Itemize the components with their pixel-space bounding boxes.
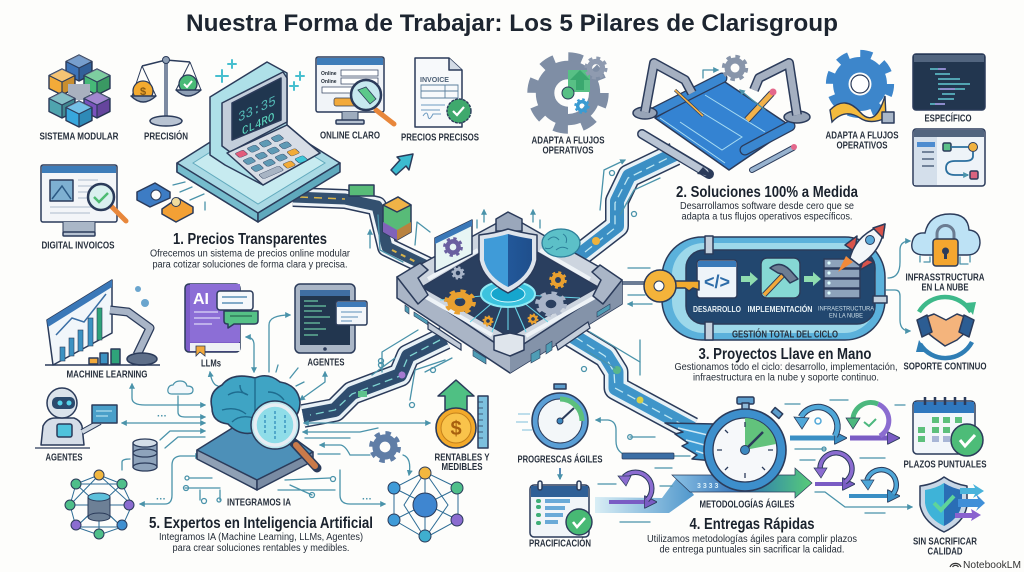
text: pillar 5 description: para crear soluciones rentables y medibles. bbox=[172, 543, 350, 554]
heading: pillar 4: 4. Entregas Rápidas bbox=[690, 516, 815, 533]
icon: winged stopwatch bbox=[665, 397, 786, 491]
label: online claro: ONLINE CLARO bbox=[320, 130, 380, 142]
icon: online monitor: Online bbox=[321, 79, 337, 85]
label: soporte continuo: SOPORTE CONTINUO bbox=[904, 362, 987, 372]
icon: calculator on platform bbox=[177, 60, 340, 222]
pipe: pillar 1 bbox=[293, 197, 435, 270]
text: pillar 3 description bbox=[674, 362, 898, 384]
text: pillar 3 description: infraestructura en la nube y soporte continuo. bbox=[693, 372, 879, 384]
text: pillar 1 description bbox=[150, 248, 351, 270]
heading: pillar 2: 2. Soluciones 100% a Medida bbox=[676, 184, 858, 201]
icon: network left bbox=[65, 470, 134, 539]
icon: hammer bbox=[761, 258, 800, 298]
panel: pillar 1 precios transparentes bbox=[40, 55, 479, 270]
label: sistema modular: SISTEMA MODULAR bbox=[40, 132, 119, 142]
label: sin sacrificar calidad: SIN SACRIFICAR bbox=[913, 536, 978, 548]
icon: tablet bbox=[295, 284, 367, 353]
panel: central hub bbox=[349, 185, 622, 373]
icon: planning calendar bbox=[530, 481, 592, 537]
label: adapta a flujos left: ADAPTA A FLUJOS bbox=[532, 136, 605, 146]
icon: robot agent bbox=[35, 388, 117, 448]
circuit lines around hub bbox=[370, 160, 660, 375]
label: especifico: ESPECÍFICO bbox=[924, 112, 972, 124]
icon: purple sprint loop left bbox=[609, 472, 652, 502]
label: agentes top: AGENTES bbox=[308, 358, 345, 368]
icon: invoice: INVOICE bbox=[420, 75, 449, 84]
panel: pillar 3 proyectos llave en mano bbox=[644, 214, 987, 384]
labels: cycle steps: DESARROLLO bbox=[693, 305, 741, 314]
corner towers bbox=[397, 263, 428, 304]
labels: cycle steps bbox=[693, 305, 875, 320]
icon: screen panel bbox=[435, 220, 472, 272]
label: rentables y medibles: RENTABLES Y bbox=[434, 452, 490, 464]
icon: puzzle pieces bbox=[137, 182, 205, 222]
title: Nuestra Forma de Trabajar: Los 5 Pilares de Clarisgroup bbox=[186, 10, 838, 37]
dots: ··· bbox=[362, 494, 372, 505]
hub walls bbox=[397, 216, 622, 353]
icon: gear with measuring tape bbox=[830, 56, 894, 123]
icon: workflow window bbox=[913, 129, 985, 186]
label: rentables y medibles bbox=[434, 452, 490, 473]
icon: online monitor bbox=[316, 57, 394, 124]
label: pracificacion: PRACIFICACIÓN bbox=[529, 536, 591, 550]
text: pillar 4 description: de entrega puntuales sin sacrificar la calidad. bbox=[660, 544, 844, 556]
icon: tiny gear right bbox=[528, 314, 538, 324]
icon: machine learning chart and arm bbox=[45, 280, 160, 365]
icon: brain bbox=[542, 229, 580, 257]
label: machine learning: MACHINE LEARNING bbox=[66, 370, 148, 380]
label: plazos puntuales: PLAZOS PUNTUALES bbox=[904, 460, 987, 470]
icon: modular cubes bbox=[49, 55, 110, 127]
icon: digital invoices monitor bbox=[41, 165, 126, 236]
label: gestion total del ciclo: GESTIÓN TOTAL DEL CICLO bbox=[732, 328, 838, 340]
icon: teal arrow bbox=[391, 154, 413, 175]
panel: pillar 5 inteligencia artificial bbox=[35, 280, 490, 554]
label: sin sacrificar calidad bbox=[913, 536, 978, 558]
stacked blocks bbox=[349, 185, 411, 240]
icon: growth coin and ruler: $ bbox=[450, 418, 462, 440]
hub pipe ports bbox=[428, 322, 590, 350]
hub base bbox=[397, 277, 622, 373]
text: pillar 5 description: Integramos IA (Machine Learning, LLMs, Agentes) bbox=[159, 532, 363, 543]
panel: pillar 4 entregas rapidas bbox=[516, 384, 987, 558]
label: sin sacrificar calidad: CALIDAD bbox=[928, 546, 962, 558]
green speed arrow bbox=[672, 468, 812, 498]
icon: blueprint and robot arms bbox=[633, 57, 810, 176]
label: adapta a flujos right: ADAPTA A FLUJOS bbox=[826, 130, 899, 142]
text: pillar 2 description bbox=[680, 201, 854, 222]
dots: ··· bbox=[157, 411, 167, 422]
icon: cloud with lock bbox=[886, 214, 980, 331]
base window details bbox=[405, 304, 610, 364]
arrow: down bbox=[559, 468, 561, 479]
text: pillar 1 description: Ofrecemos un sistema de precios online modular bbox=[150, 248, 351, 260]
labels: cycle steps: EN LA NUBE bbox=[829, 312, 864, 320]
icon: blue sprint loop bbox=[790, 407, 842, 438]
circuit lines pillar 4 right bbox=[785, 400, 912, 513]
icon: handshake with cycle arrows bbox=[916, 297, 976, 358]
label: adapta a flujos right: OPERATIVOS bbox=[836, 140, 888, 152]
icon: online monitor: Online bbox=[321, 71, 337, 77]
text: pillar 3 description: Gestionamos todo el ciclo: desarrollo, implementación, bbox=[674, 362, 898, 373]
label: metodologias agiles: METODOLOGÍAS ÁGILES bbox=[700, 498, 795, 510]
icon: cloud small bbox=[168, 381, 193, 394]
circuit lines pillar 4 left bbox=[596, 420, 690, 522]
icon: small orange gear bbox=[551, 273, 565, 287]
icon: ai book: AI bbox=[193, 291, 209, 308]
icon: rocket bbox=[838, 224, 885, 272]
text: pillar 5 description bbox=[159, 532, 363, 554]
heading: pillar 1: 1. Precios Transparentes bbox=[173, 231, 327, 248]
text: pillar 1 description: para cotizar soluciones de forma clara y precisa. bbox=[152, 260, 348, 270]
icon: gray gear bbox=[538, 294, 564, 314]
icon: orange gear bbox=[447, 292, 473, 312]
icon: quality shield bbox=[920, 477, 985, 532]
icon: calculator on platform: CL4RO bbox=[242, 110, 274, 139]
label: progrescas agiles: PROGRESCAS ÁGILES bbox=[518, 452, 603, 466]
icon: gear bbox=[372, 434, 398, 460]
label: infraestructura en la nube: INFRASSTRUCTURA bbox=[906, 272, 984, 284]
pipe: pillar 5 bbox=[303, 338, 445, 416]
label: agentes left: AGENTES bbox=[46, 452, 83, 464]
label: digital invoicos: DIGITAL INVOICOS bbox=[42, 240, 115, 252]
icon: code window bbox=[697, 260, 737, 298]
panel: pillar 2 soluciones a medida bbox=[532, 54, 985, 222]
label: integramos ia: INTEGRAMOS IA bbox=[227, 498, 291, 508]
label: infraestructura en la nube: EN LA NUBE bbox=[922, 282, 969, 294]
icon: scales bbox=[131, 56, 201, 126]
icon: ai brain with chip and magnifier bbox=[197, 376, 317, 490]
dots bbox=[156, 411, 372, 505]
label: precision: PRECISIÓN bbox=[144, 130, 188, 142]
labels: cycle steps: INFRAESTRUCTURA bbox=[818, 306, 875, 312]
icon: server stack bbox=[824, 259, 860, 298]
cycle capsule bbox=[662, 236, 887, 340]
arrows between steps bbox=[741, 272, 821, 286]
text: pillar 2 description: Desarrollamos software desde cero que se bbox=[680, 201, 854, 212]
label: adapta a flujos left: OPERATIVOS bbox=[542, 146, 594, 156]
icon: deadlines calendar bbox=[913, 397, 983, 456]
text: pillar 2 description: adapta a tus flujos operativos específicos. bbox=[682, 212, 852, 222]
icon: network right bbox=[388, 467, 463, 542]
connecting pipes bbox=[293, 154, 692, 429]
icon: right sprint loops bbox=[814, 453, 896, 496]
heading: pillar 5: 5. Expertos en Inteligencia Artificial bbox=[149, 515, 373, 532]
label: infraestructura en la nube bbox=[906, 272, 984, 294]
small pipe band bbox=[622, 453, 674, 459]
label: adapta a flujos right bbox=[826, 130, 899, 152]
heading: pillar 3: 3. Proyectos Llave en Mano bbox=[698, 346, 872, 363]
hub glow ring bbox=[481, 281, 535, 307]
label: precios precisos: PRECIOS PRECISOS bbox=[401, 132, 479, 144]
hub circuit surface bbox=[422, 236, 598, 337]
icon: tiny gear bbox=[484, 316, 492, 326]
icon: growth coin and ruler bbox=[436, 380, 488, 448]
icon: invoice bbox=[415, 58, 471, 127]
icon: purple green sprint loop bbox=[846, 403, 895, 438]
icon: code window bbox=[913, 54, 985, 110]
label: adapta a flujos left bbox=[532, 136, 605, 156]
green speed arrow: 3 3 3 3 bbox=[697, 483, 719, 490]
pipe: pillar 3 bbox=[622, 281, 650, 285]
dots: ··· bbox=[156, 494, 166, 505]
label: llms: LLMs bbox=[201, 358, 221, 370]
icon: scales: $ bbox=[140, 86, 146, 98]
pipe: pillar 4 bbox=[568, 333, 692, 429]
pipe: pillar 2 bbox=[577, 154, 675, 257]
label: rentables y medibles: MEDIBLES bbox=[442, 462, 483, 473]
icon: shield bbox=[479, 229, 537, 293]
icon: ai book bbox=[185, 284, 258, 356]
icon: database bbox=[133, 439, 157, 471]
text: pillar 4 description: Utilizamos metodologías ágiles para complir plazos bbox=[647, 534, 857, 545]
circuit lines pillar 5 bbox=[122, 315, 445, 504]
left speed arrow track bbox=[595, 475, 694, 513]
text: pillar 4 description bbox=[647, 534, 857, 556]
labels: cycle steps: IMPLEMENTACIÓN bbox=[748, 305, 813, 314]
icon: small stopwatch bbox=[516, 384, 588, 449]
icon: code window: </> bbox=[704, 272, 730, 292]
watermark: NotebookLM: NotebookLM bbox=[963, 559, 1021, 571]
icon: calculator on platform: 33:35 bbox=[238, 93, 276, 127]
icon: key bbox=[644, 270, 699, 302]
icon: small gray gear bbox=[453, 268, 463, 278]
icon: adaptive gear bbox=[535, 59, 605, 126]
